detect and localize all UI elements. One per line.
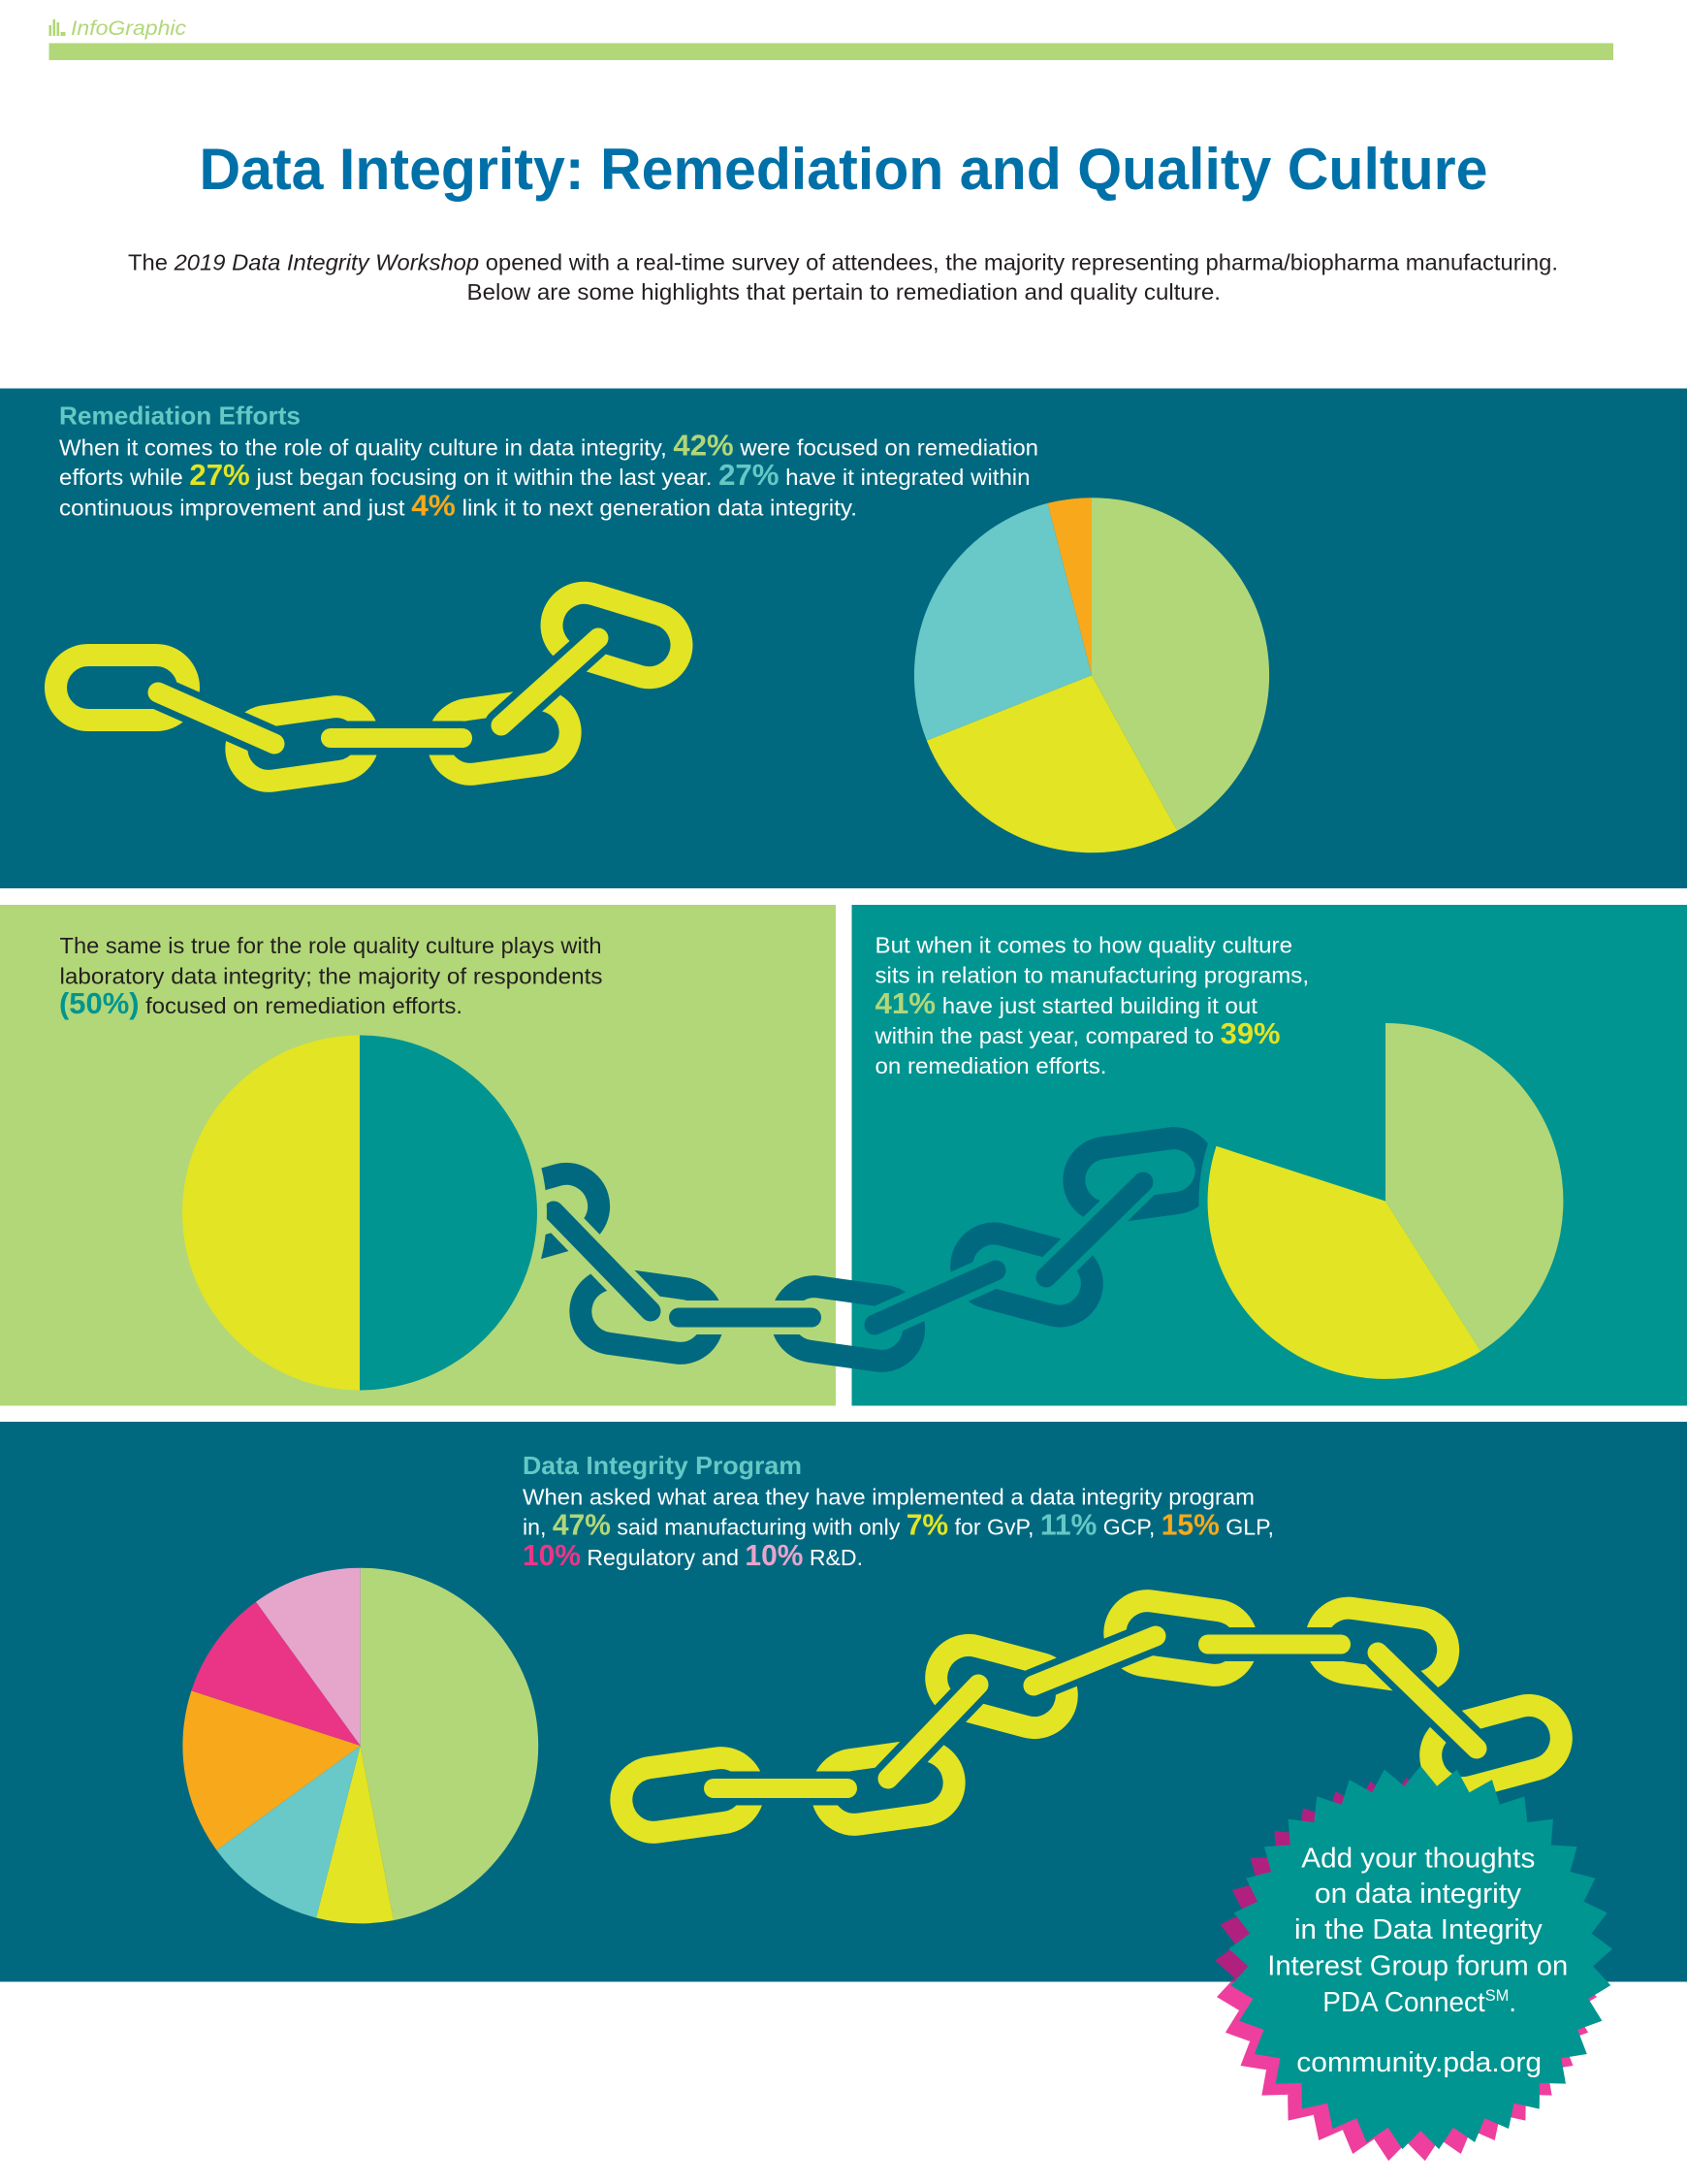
body text: in, 47% said manufacturing with only 7% for GvP, 11% GCP, 15% GLP,	[523, 1509, 1274, 1542]
pie chart: 42 / 27 / 27 / 4	[914, 498, 1269, 852]
callout text: .	[1509, 1987, 1516, 2018]
body text: When it comes to the role of quality culture in data integrity, 42% were focused on remediation	[59, 429, 1038, 462]
body text: sits in relation to manufacturing programs,	[875, 962, 1309, 987]
callout text	[1267, 1844, 1568, 2078]
body text: The same is true for the role quality culture plays with	[60, 933, 601, 958]
callout text: community.pda.org	[1296, 2047, 1542, 2078]
chain graphic	[618, 1596, 1569, 1837]
header logo: InfoGraphic	[48, 17, 187, 40]
body text: on remediation efforts.	[875, 1053, 1107, 1078]
heading: remediation efforts: Remediation Efforts	[59, 401, 301, 431]
intro text: Below are some highlights that pertain to remediation and quality culture.	[467, 279, 1221, 305]
title: Data Integrity: Remediation and Quality Culture	[200, 137, 1487, 202]
body text: When asked what area they have implemented a data integrity program	[523, 1485, 1255, 1510]
callout text: SM	[1485, 1986, 1509, 2005]
header green bar	[48, 43, 1613, 60]
callout text: Add your thoughts	[1301, 1844, 1535, 1875]
heading: data integrity program: Data Integrity Program	[523, 1451, 802, 1480]
panel: remediation efforts	[0, 388, 1687, 888]
callout text: PDA Connect	[1322, 1987, 1491, 2018]
icon: small bar chart	[48, 19, 66, 36]
callout text: in the Data Integrity	[1294, 1914, 1543, 1945]
panel: data integrity program	[0, 1422, 1687, 1982]
pie chart: 47 / 7 / 11 / 15 / 10 / 10	[182, 1568, 538, 1923]
callout text: Interest Group forum on	[1267, 1951, 1568, 1982]
body text	[59, 933, 603, 1020]
body text: (50%) focused on remediation efforts.	[59, 987, 462, 1020]
panel background	[0, 388, 1687, 888]
starburst shadow over panel	[1215, 1778, 1594, 1982]
logo wordmark: InfoGraphic	[71, 17, 187, 40]
body text: 41% have just started building it out	[875, 987, 1257, 1020]
body text	[874, 933, 1309, 1078]
body text: efforts while 27% just began focusing on it within the last year. 27% have it integrated within	[59, 459, 1030, 492]
body text: But when it comes to how quality culture	[875, 933, 1292, 958]
panel background	[851, 905, 1687, 1406]
panel: laboratory data integrity	[0, 905, 836, 1406]
body text: 10% Regulatory and 10% R&D.	[523, 1539, 863, 1572]
starburst front	[1228, 1766, 1613, 2151]
panel background	[0, 1422, 1687, 1982]
panel: manufacturing programs	[851, 905, 1687, 1406]
intro text	[128, 249, 1558, 305]
chain graphic spanning both middle panels	[461, 1134, 1210, 1365]
body text: laboratory data integrity; the majority of respondents	[60, 963, 603, 988]
panel background	[0, 905, 836, 1406]
starburst shadow below panel	[1217, 1982, 1597, 2161]
pie chart: 50 / 50	[173, 1026, 547, 1400]
callout: starburst badge	[1214, 1766, 1613, 2163]
pie chart: 41 / 39 / 20	[1198, 1014, 1573, 1388]
body text	[59, 429, 1038, 523]
chain graphic	[56, 585, 689, 786]
body text: continuous improvement and just 4% link it to next generation data integrity.	[59, 490, 857, 523]
callout text: on data integrity	[1315, 1879, 1522, 1910]
body text: within the past year, compared to 39%	[874, 1017, 1280, 1050]
intro text: The 2019 Data Integrity Workshop opened with a real-time survey of attendees, the majority representing pharma/biopharma manufacturing.	[128, 249, 1558, 274]
body text	[523, 1485, 1274, 1572]
